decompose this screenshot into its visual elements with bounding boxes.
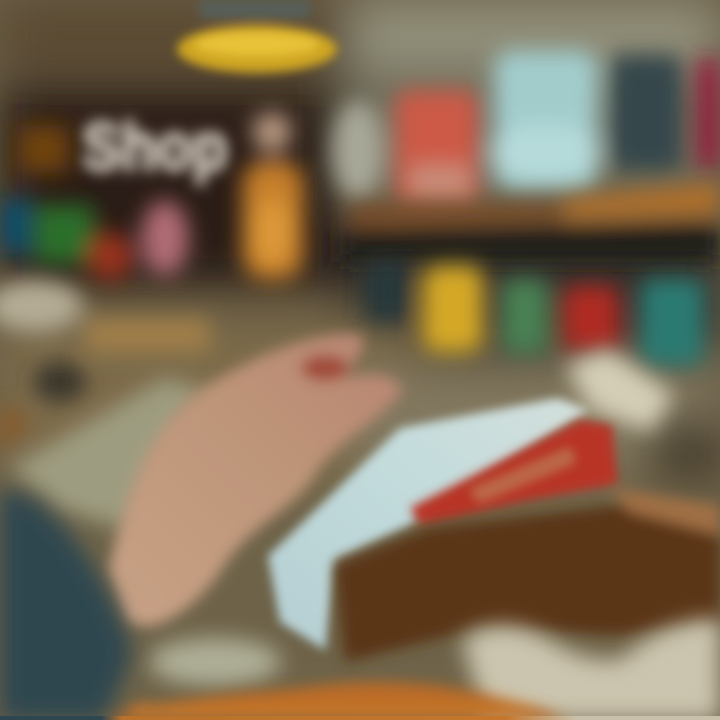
left counter [0, 280, 210, 530]
hand [108, 334, 402, 626]
white cloths [149, 618, 720, 720]
white box corner [565, 348, 675, 432]
blurred shop sign: Shop [82, 109, 228, 185]
frame bottom edge [0, 716, 720, 720]
ceiling lamp [177, 0, 337, 73]
lower shelf bottles [365, 262, 704, 366]
upper right shelf goods [332, 50, 720, 205]
dark blue sleeve [0, 488, 132, 720]
orange bottle [242, 112, 304, 280]
wooden shelf [340, 182, 720, 262]
upper left shelf items [0, 125, 189, 280]
brown basket [335, 488, 720, 662]
red package [410, 420, 618, 525]
receipt paper [268, 398, 590, 650]
orange counter foreground [105, 682, 560, 720]
